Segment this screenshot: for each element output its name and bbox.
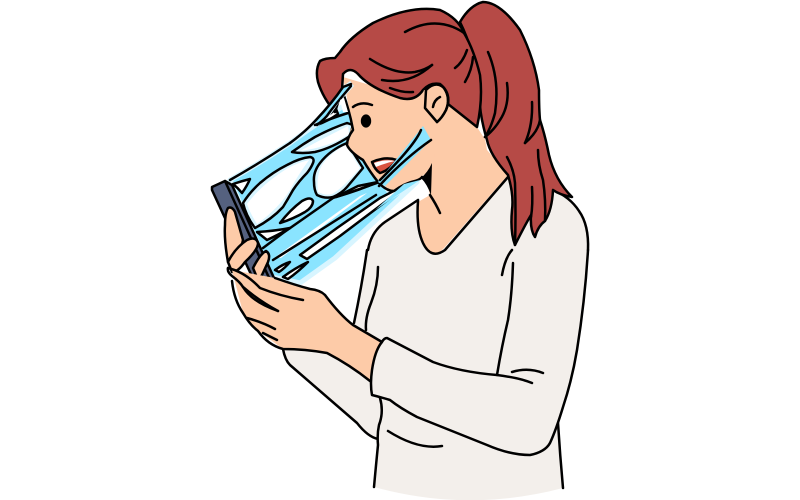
- neck: [380, 107, 508, 254]
- phone: [212, 181, 274, 290]
- sweater fold lines: [366, 250, 512, 447]
- small goo holes: [233, 109, 413, 279]
- goo strand to forehead: [290, 82, 353, 143]
- jaw shadow: [421, 163, 432, 195]
- hair: crown and bangs: [317, 9, 481, 127]
- goo hole: large oval: [243, 157, 314, 228]
- face: [342, 77, 450, 195]
- goo hole: oval by nose: [314, 143, 363, 198]
- eyebrow: [353, 103, 372, 107]
- fingers on phone: [225, 208, 269, 280]
- ear: [418, 84, 448, 122]
- stretched goo body: [230, 100, 417, 283]
- goo hole: oval under forehead: [292, 123, 353, 153]
- white gap behind neck: [478, 100, 508, 174]
- cheek strand: [375, 126, 431, 210]
- hair: ponytail and back: [460, 2, 572, 245]
- sweater torso: [354, 177, 588, 500]
- eye: [361, 114, 371, 128]
- far sleeve: [283, 349, 385, 439]
- near hand and fingers: [225, 208, 382, 381]
- near sleeve: [371, 250, 588, 455]
- mouth: [372, 158, 397, 173]
- goo top edge: [230, 143, 290, 180]
